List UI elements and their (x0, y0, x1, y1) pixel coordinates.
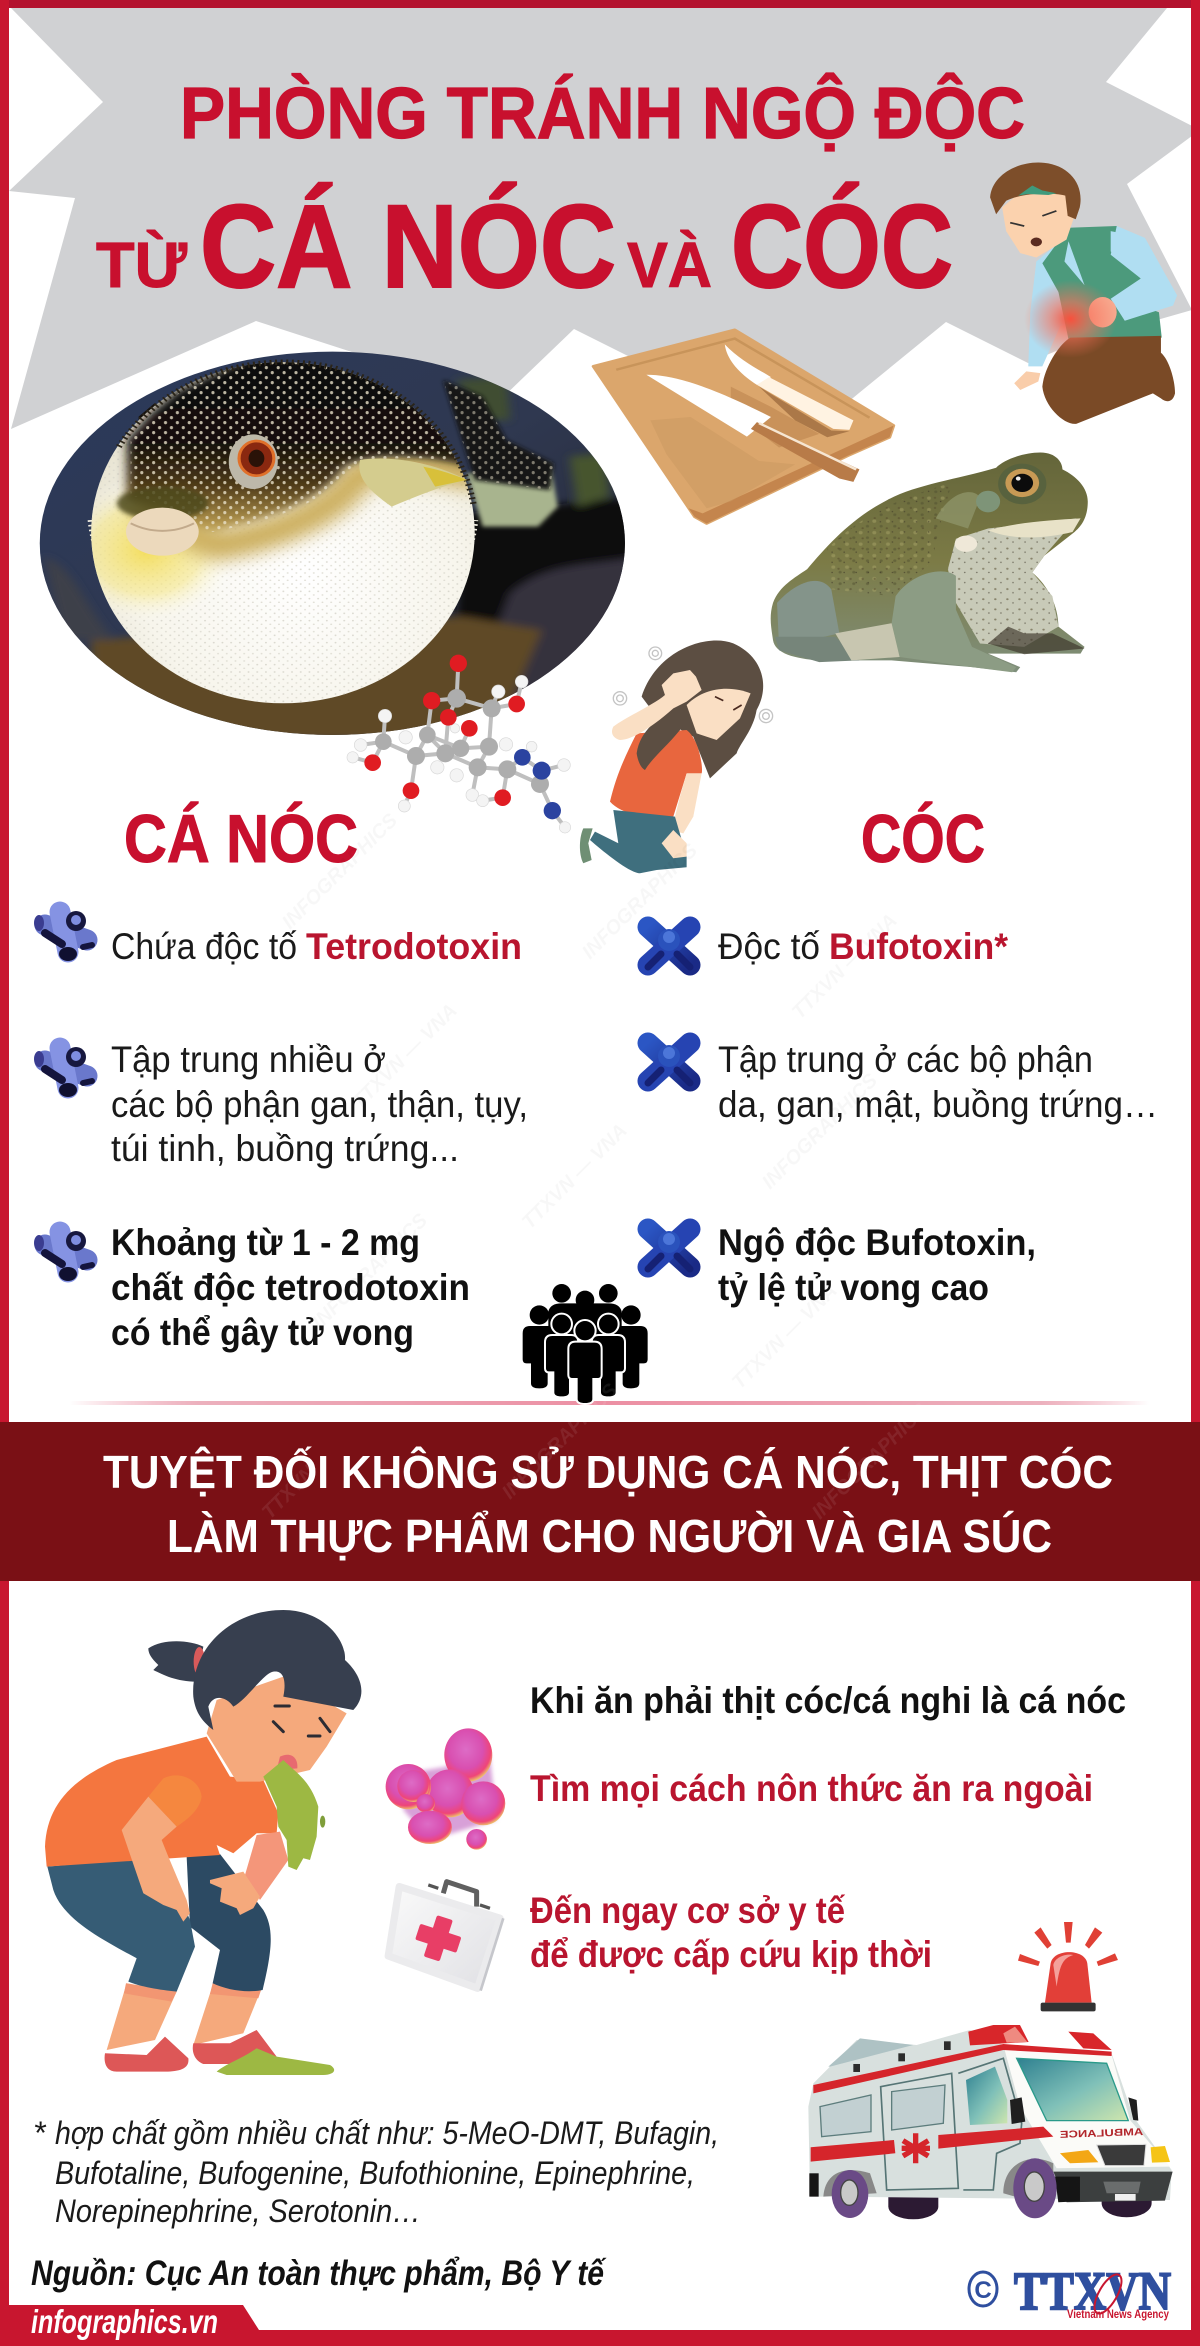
logo tagline: Vietnam News Agency (1067, 2307, 1169, 2321)
banner line 1: TUYỆT ĐỐI KHÔNG SỬ DỤNG CÁ NÓC, THỊT CÓC (103, 1446, 1113, 1498)
watermarks: TTXVN — VNA (348, 1000, 462, 1114)
watermarks: TTXVN — VNA (518, 1120, 632, 1234)
banner: warning: TTXVN (258, 1461, 320, 1524)
panel: cá nóc facts (34, 911, 528, 1353)
title word: cóc: CÓC (731, 181, 953, 313)
illustration: ambulance: AMBULANCE (1059, 2127, 1143, 2141)
banner: warning (0, 1379, 1200, 1581)
fact: organs: da, gan, mật, buồng trứng… (718, 1084, 1158, 1125)
photo: pufferfish (36, 350, 637, 740)
icon: pink bubbles (386, 1728, 505, 1850)
panel: cóc facts (648, 926, 1158, 1308)
photo: toad (771, 453, 1088, 672)
icon: group of people (523, 1284, 648, 1404)
column heading: cóc: CÓC (861, 801, 985, 877)
illustration: vomiting woman (45, 1610, 361, 2075)
fact: toxin name: Bufotoxin* (829, 926, 1009, 967)
title word: và: VÀ (627, 229, 712, 301)
small knife (725, 344, 853, 437)
fact: organs: các bộ phận gan, thận, tụy, (111, 1084, 528, 1125)
footnote: hợp chất gồm nhiều chất như: 5-MeO-DMT, Bufagin, (55, 2115, 719, 2151)
illustration: tetrodotoxin molecule (347, 655, 571, 833)
fact: lethal dose: có thể gây tử vong (111, 1312, 414, 1353)
icon: first aid kit (388, 1882, 503, 1991)
instruction heading: Khi ăn phải thịt cóc/cá nghi là cá nóc (530, 1680, 1126, 1721)
fact: organs: Tập trung nhiều ở (111, 1039, 386, 1080)
footnote: Bufotaline, Bufogenine, Bufothionine, Epinephrine, (55, 2155, 695, 2191)
instruction: go to hospital: Đến ngay cơ sở y tế (530, 1890, 845, 1931)
fact: lethal dose (111, 1222, 470, 1353)
footer bar with site name (0, 2303, 1200, 2346)
icon: molecule bullet 2 (34, 1047, 92, 1097)
watermarks: INFOGRAPHICS (578, 839, 702, 964)
fact: toxin name: Độc tố (718, 926, 820, 967)
title word: cá nóc: CÁ NÓC (200, 181, 616, 313)
fact: mortality: Ngộ độc Bufotoxin, (718, 1222, 1036, 1263)
title line 1: PHÒNG TRÁNH NGỘ ĐỘC (180, 73, 1025, 154)
illustration: cutting board with knives (593, 330, 894, 523)
copyright mark (969, 2272, 997, 2306)
watermarks: INFOGRAPHICS (308, 1209, 432, 1334)
fact: mortality (718, 1222, 1036, 1308)
fact: toxin name (718, 926, 1009, 967)
fact: toxin name: Chứa độc tố (111, 926, 297, 967)
watermarks (278, 809, 902, 1394)
footnote (33, 2115, 719, 2229)
illustration: ambulance (808, 2025, 1173, 2219)
fact: organs (718, 1039, 1158, 1125)
copyright mark: C (974, 2277, 992, 2304)
big knife (646, 375, 859, 482)
icon: siren (1018, 1922, 1118, 2011)
fact: organs: Tập trung ở các bộ phận (718, 1039, 1093, 1080)
illustration: woman with headache (580, 641, 773, 873)
icon: molecule bullet 3 (34, 1231, 92, 1281)
illustration: man with stomach ache (990, 163, 1177, 424)
fact: lethal dose: Khoảng từ 1 - 2 mg (111, 1222, 420, 1263)
column heading: cá nóc: CÁ NÓC (124, 801, 358, 877)
banner line 2: LÀM THỰC PHẨM CHO NGƯỜI VÀ GIA SÚC (167, 1510, 1052, 1562)
banner: warning: INFOGRAPHICS (498, 1379, 622, 1504)
instruction: induce vomiting: Tìm mọi cách nôn thức ăn ra ngoài (530, 1768, 1093, 1809)
instructions text (530, 1680, 1126, 1975)
icon: blue molecule bullet 3 (648, 1229, 690, 1269)
site name: infographics.vn (31, 2303, 218, 2340)
title (96, 73, 1025, 313)
footnote: * (33, 2115, 47, 2151)
banner: warning: INFOGRAPHICS (808, 1399, 932, 1524)
icon: blue molecule bullet 2 (648, 1043, 690, 1083)
fact: toxin name (111, 926, 522, 967)
icon: molecule bullet 1 (34, 911, 92, 961)
icon: blue molecule bullet 1 (648, 927, 690, 967)
fact: organs: túi tinh, buồng trứng... (111, 1128, 459, 1169)
title word: từ: TỪ (96, 229, 188, 301)
gray starburst header shape (9, 8, 1200, 442)
watermarks: INFOGRAPHICS (758, 1069, 882, 1194)
footnote: Norepinephrine, Serotonin… (55, 2193, 421, 2229)
watermarks: TTXVN — VNA (788, 910, 902, 1024)
fact: mortality: tỷ lệ tử vong cao (718, 1267, 989, 1308)
logo wordmark: TTXVN (1014, 2261, 1171, 2321)
fact: toxin name: Tetrodotoxin (306, 926, 522, 967)
source line: Nguồn: Cục An toàn thực phẩm, Bộ Y tế (31, 2254, 607, 2293)
fact: lethal dose: chất độc tetrodotoxin (111, 1267, 470, 1308)
watermarks: TTXVN — VNA (728, 1280, 842, 1394)
fact: organs (111, 1039, 528, 1169)
instruction: go to hospital: để được cấp cứu kịp thời (530, 1934, 932, 1975)
instruction: go to hospital (530, 1890, 932, 1975)
watermarks: INFOGRAPHICS (278, 809, 402, 934)
logo: TTXVN (969, 2261, 1171, 2321)
